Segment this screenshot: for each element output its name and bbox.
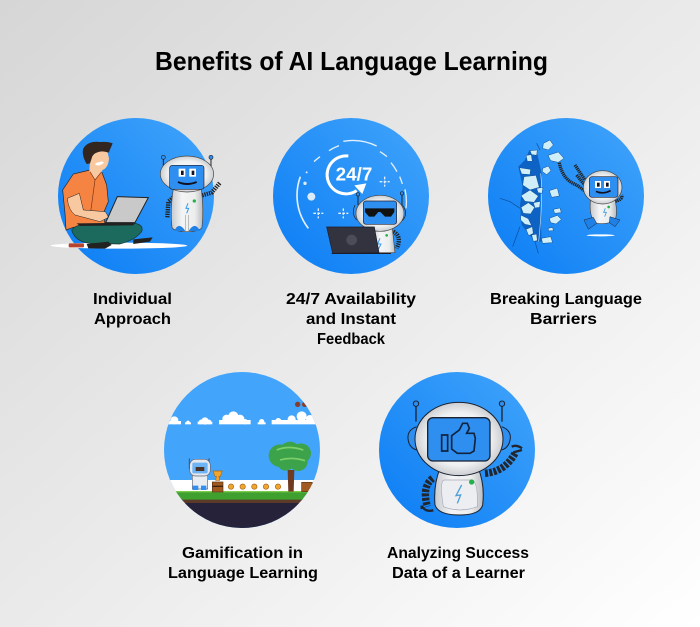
title: Benefits of AI Language Learning: [155, 46, 548, 76]
label: Individual: [93, 291, 172, 308]
icon: jumping robot: [559, 163, 622, 236]
label: [93, 291, 172, 328]
label: Analyzing Success: [387, 545, 529, 562]
game scene in circle: [162, 370, 325, 533]
label: Feedback: [317, 331, 385, 348]
panel: analyzing success data: [379, 372, 535, 582]
circle background: [273, 118, 429, 274]
panel: individual approach: [51, 118, 220, 328]
label: [168, 545, 318, 582]
label: [286, 291, 416, 348]
label: Language Learning: [168, 565, 318, 582]
panel: 24/7 availability: [273, 118, 429, 348]
label: [387, 545, 529, 582]
label: 24/7 Availability: [286, 291, 416, 308]
label: Gamification in: [182, 545, 303, 562]
label: [490, 291, 642, 328]
icon: clock dial with 24/7: 24/7: [336, 163, 372, 184]
icon: waving robot: [160, 155, 220, 232]
panel: breaking language barriers: [488, 118, 644, 328]
circle background: [58, 118, 214, 274]
icon: cracked wall: [500, 140, 564, 253]
label: and Instant: [306, 311, 396, 328]
label: Data of a Learner: [392, 565, 525, 582]
icon: robot with thumbs up: [408, 401, 522, 515]
circle background: [488, 118, 644, 274]
icon: robot with sunglasses and laptop: [327, 192, 406, 254]
circle background: [379, 372, 535, 528]
icon: clock dial with 24/7: [297, 141, 406, 228]
panel: gamification: [162, 370, 325, 582]
label: Barriers: [530, 311, 597, 328]
label: Breaking Language: [490, 291, 642, 308]
label: Approach: [94, 311, 171, 328]
icon: student with laptop: [51, 142, 187, 249]
